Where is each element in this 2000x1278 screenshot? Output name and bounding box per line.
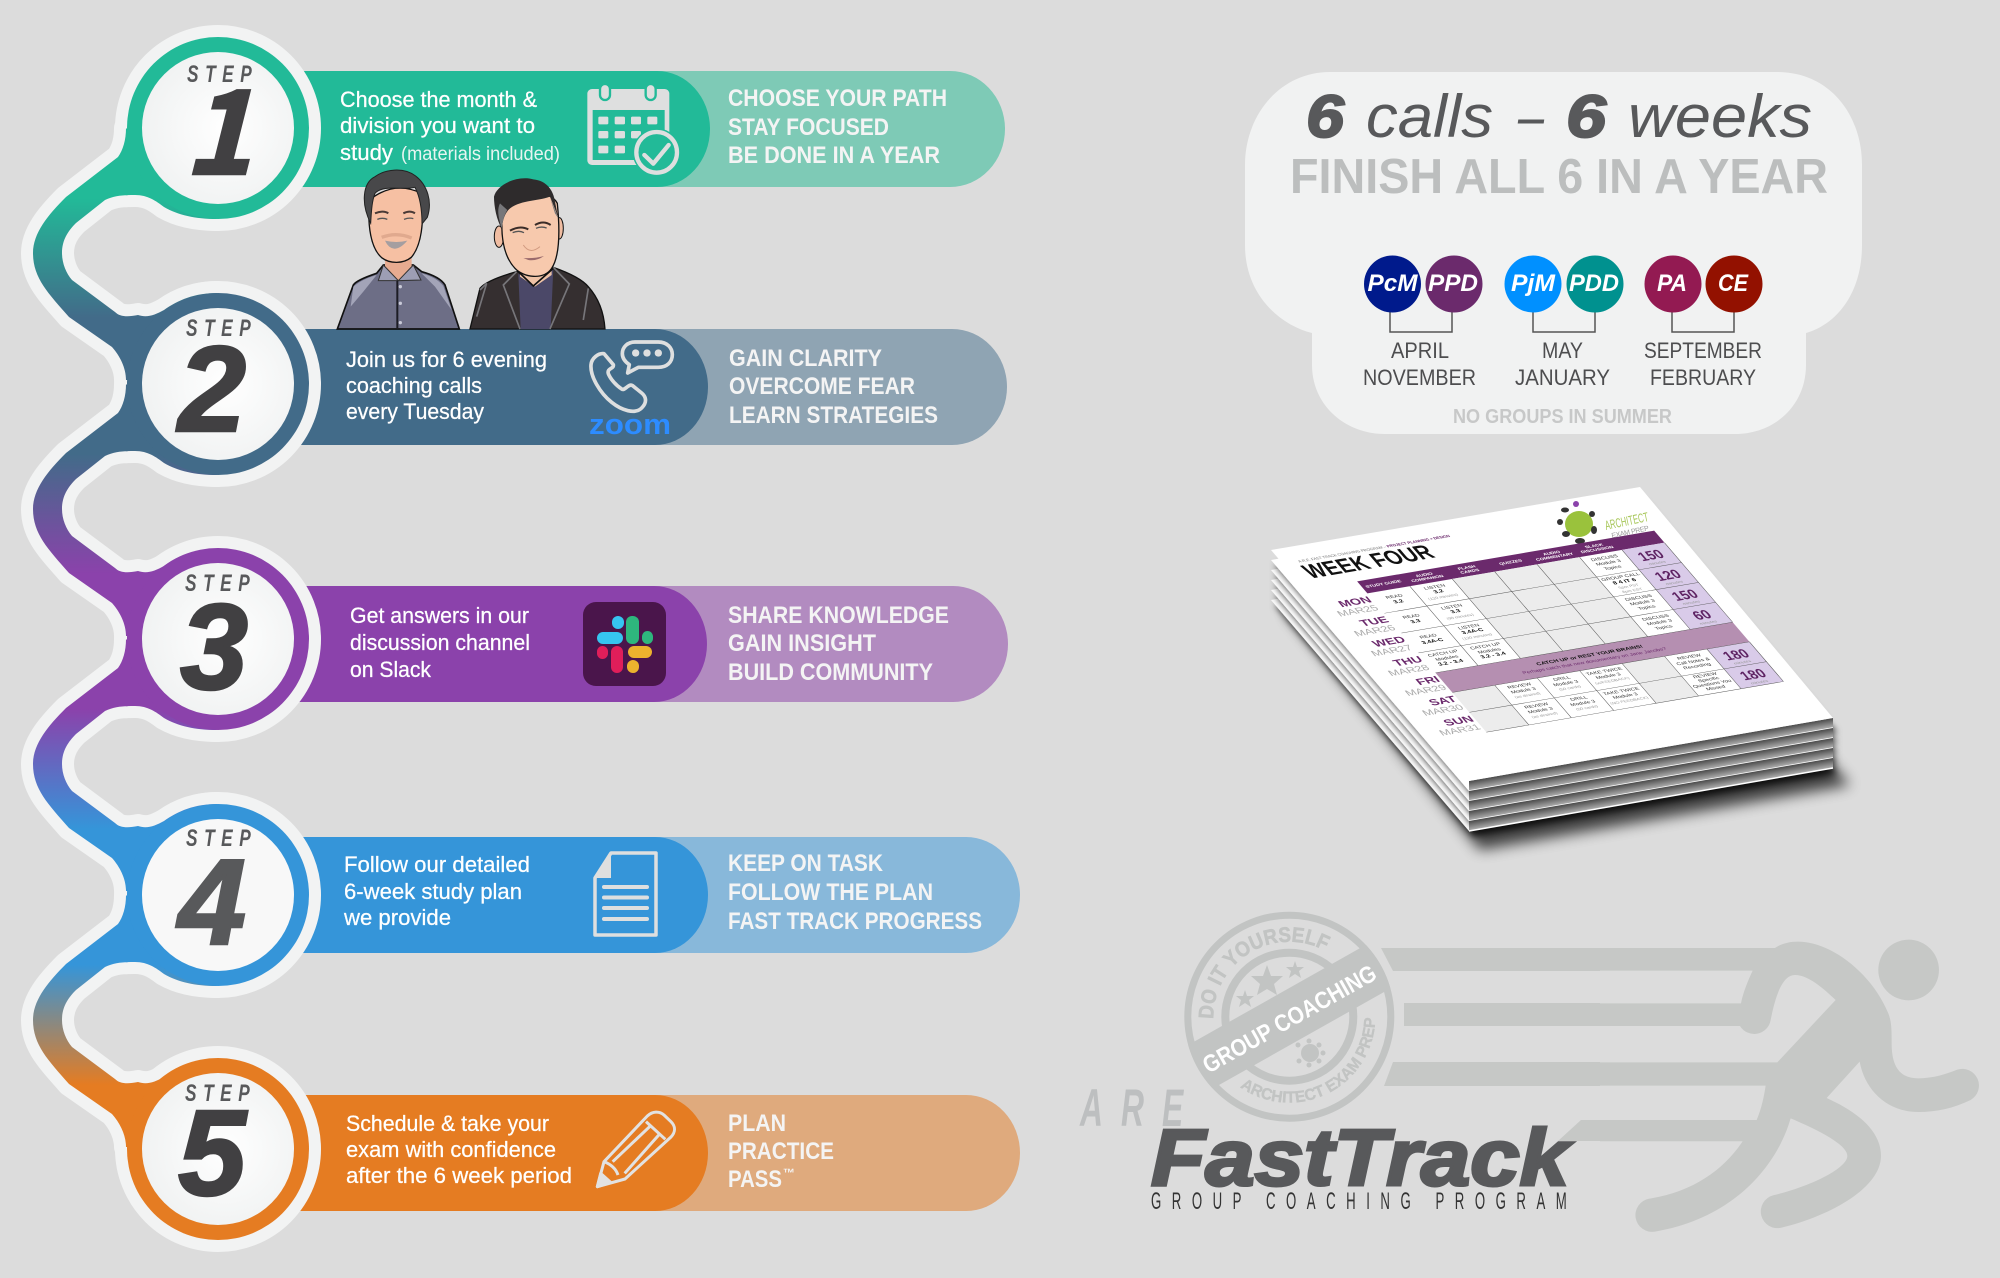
step 4 badge [127, 804, 309, 986]
text: step 1 description [340, 87, 560, 165]
table: minutes [1647, 560, 1668, 566]
text: step 5 benefits: PASS [728, 1166, 782, 1193]
heading: 6 calls 6 weeks: 6 [1566, 83, 1607, 150]
text: step 2 benefits: LEARN STRATEGIES [729, 402, 938, 429]
heading: finish all 6 in a year: FINISH ALL 6 IN A YEAR [1290, 150, 1828, 204]
text: step 4 description: Follow our detailed [344, 852, 530, 877]
table: minutes [1750, 679, 1770, 685]
table: CATCH UP [1427, 649, 1460, 658]
table: minutes [1698, 619, 1719, 626]
table: LISTEN [1423, 584, 1447, 591]
table: 120 [1651, 567, 1685, 584]
table: MAR26 [1352, 624, 1398, 638]
panel: schedule [1245, 72, 1862, 434]
table: Topics [1654, 624, 1675, 631]
heading: 6 calls 6 weeks: 6 [1306, 83, 1345, 150]
exam division circles: PDD [1569, 270, 1619, 297]
table: (50 cards) [1558, 684, 1583, 691]
table: READ [1402, 613, 1422, 620]
table: DRILL [1552, 676, 1572, 682]
icon: slack [583, 602, 666, 686]
step 2 badge [127, 293, 309, 475]
exam division circles: CE [1718, 270, 1749, 297]
icon: pencil [597, 1112, 674, 1187]
month labels [1363, 338, 1762, 390]
table: 3.2 - 3.4 [1479, 651, 1508, 660]
table: (120 minutes) [1427, 592, 1460, 601]
table: LISTEN [1457, 623, 1481, 631]
text: step 5 benefits: PLAN [728, 1110, 786, 1137]
table: minutes [1664, 579, 1685, 586]
heading: 6 calls 6 weeks [1306, 83, 1812, 150]
table: Perhaps catch that new documentary on Jane Jacobs? [1521, 647, 1668, 676]
text: step 4 benefits: FAST TRACK PROGRESS [728, 908, 982, 935]
step 4 badge: STEP [186, 825, 251, 852]
table: AUDIO [1415, 572, 1435, 579]
table: DISCUSS [1624, 594, 1654, 602]
heading: 6 calls 6 weeks: calls [1366, 83, 1493, 150]
panel: step 2 bar [290, 329, 1007, 445]
runner with speed lines [1381, 940, 1979, 1232]
week four schedule sheet: A.R.E. FAST TRACK COACHING PROGRAM – PROJECT PLANNING + DESIGN [1297, 534, 1452, 564]
month labels: JANUARY [1515, 365, 1610, 390]
stamp: do it yourself group coaching: DO IT YOURSELF [1198, 927, 1331, 1018]
text: step 3 benefits: GAIN INSIGHT [728, 630, 876, 657]
table: GROUP CALL [1600, 572, 1642, 583]
table: TAKE TWICE [1602, 687, 1642, 697]
exam division circles: PjM [1511, 270, 1556, 297]
study plan paper stack [1271, 487, 1850, 850]
step 3 badge: 3 [180, 579, 248, 715]
step 4 badge: 4 [175, 834, 246, 970]
table: FRI [1413, 674, 1443, 687]
panel: step 5 bar [290, 1095, 1020, 1211]
table: FLASH [1457, 564, 1478, 571]
table: MON [1335, 595, 1375, 609]
table: REVIEW [1523, 702, 1551, 710]
table: Missed [1705, 685, 1727, 692]
table: READ [1385, 594, 1405, 600]
logo: ARE FastTrack group coaching program [1079, 1079, 1573, 1215]
text: step 1 benefits [728, 85, 947, 169]
flowing path: gradient connectors [33, 128, 217, 1147]
table: MAR27 [1369, 644, 1415, 658]
text: step 5 description [346, 1111, 572, 1188]
exam division circles [1364, 256, 1762, 332]
table: minutes [1681, 599, 1702, 606]
text: step 5 description: after the 6 week period [346, 1163, 572, 1188]
icon: phone with speech bubble and zoom [589, 342, 672, 441]
table: Module 3 [1527, 707, 1555, 715]
text: step 3 description: Get answers in our [350, 603, 529, 628]
text: step 3 description [350, 603, 530, 682]
table: 60 [1689, 607, 1715, 623]
table: Module 3 [1646, 619, 1674, 627]
table: SLACK [1584, 543, 1606, 550]
text: step 2 benefits [729, 345, 938, 429]
table: REVIEW [1506, 682, 1534, 690]
text: step 5 benefits: ™ [783, 1166, 795, 1180]
table: DISCUSSION [1580, 545, 1616, 555]
month labels: MAY [1542, 338, 1583, 363]
illustration: two coaches caricature [337, 170, 605, 329]
text: step 4 benefits: KEEP ON TASK [728, 850, 884, 877]
exam division circles: PPD [1428, 270, 1478, 297]
month labels: FEBRUARY [1650, 365, 1756, 390]
table: MAR25 [1335, 604, 1381, 619]
table: WED [1369, 634, 1409, 649]
text: step 2 description: every Tuesday [346, 399, 484, 424]
text: step 2 benefits: OVERCOME FEAR [729, 373, 915, 400]
table: (as desired) [1513, 691, 1542, 699]
table: TAKE TWICE [1585, 667, 1625, 677]
table: 5pm PST [1617, 583, 1640, 590]
week four schedule sheet [1292, 503, 1783, 739]
week four schedule sheet: WEEK FOUR [1296, 540, 1440, 583]
table: (w/FEEDBACK) [1594, 676, 1631, 685]
table: READ [1419, 633, 1439, 640]
table: Module 3 [1612, 692, 1639, 700]
text: step 5 description: Schedule & take your [346, 1111, 549, 1136]
table: COMPANION [1410, 574, 1446, 584]
panel: step 3 bar [290, 586, 1008, 702]
text: step 1 benefits: BE DONE IN A YEAR [728, 142, 940, 169]
table: QUIZZES [1498, 559, 1524, 566]
text: step 3 benefits: BUILD COMMUNITY [728, 659, 933, 686]
table: Module 3 [1595, 559, 1623, 567]
text: step 4 description [343, 852, 530, 930]
table: 150 [1668, 587, 1702, 604]
step 5 badge: 5 [178, 1085, 248, 1221]
table: REVIEW [1676, 653, 1704, 661]
panel: step 4 bar [290, 837, 1020, 953]
table: AUDIO [1542, 550, 1562, 557]
stamp: do it yourself group coaching: ARCHITECT EXAM PREP [1240, 1018, 1375, 1103]
table: 3.4A-C [1420, 637, 1446, 646]
text: step 5 benefits: PRACTICE [728, 1138, 834, 1165]
table: 180 [1736, 666, 1770, 683]
exam division circles: PcM [1368, 270, 1419, 297]
exam division circles: PA [1657, 270, 1687, 297]
table: MAR29 [1403, 683, 1449, 698]
logo: ARE FastTrack group coaching program: FastTrack [1151, 1113, 1573, 1202]
text: step 4 description: 6-week study plan [344, 879, 522, 904]
table: 3.2 - 3.4 [1437, 658, 1466, 667]
heading: 6 calls 6 weeks: weeks [1628, 83, 1812, 150]
step 3 badge: STEP [185, 570, 250, 597]
table: Module 3 [1510, 687, 1538, 695]
table: Call Notes & [1675, 657, 1712, 667]
text: step 1 benefits: STAY FOCUSED [728, 114, 889, 141]
text: step 2 description: Join us for 6 evening [346, 347, 547, 372]
logo on sheet: EXAM PREP [1611, 525, 1650, 540]
table: CARDS [1459, 568, 1481, 575]
text: step 1 description: study [340, 140, 393, 165]
icon: phone with speech bubble and zoom: zoom [589, 409, 671, 441]
step 2 badge: STEP [186, 315, 251, 342]
month labels: APRIL [1391, 338, 1449, 363]
table: Topics [1637, 604, 1658, 611]
text: step 5 benefits [728, 1110, 834, 1193]
table: (50 cards) [1575, 704, 1600, 711]
left coach [337, 170, 459, 329]
table: SUN [1440, 714, 1477, 728]
table: Module 3 [1595, 672, 1622, 681]
stamp: do it yourself group coaching [1184, 912, 1394, 1122]
heading: 6 calls 6 weeks: – [1517, 83, 1544, 150]
table: SAT [1426, 694, 1460, 708]
table: DISCUSS [1641, 614, 1671, 622]
text: step 3 description: discussion channel [350, 630, 530, 655]
table: Specific [1697, 676, 1721, 684]
table: 3.2 [1392, 598, 1406, 605]
table: 3.4A-C [1460, 627, 1486, 636]
icon: calendar with check [587, 84, 681, 176]
step 2 badge: 2 [176, 321, 246, 457]
right coach [470, 178, 605, 329]
text: step 1 description: (materials included) [401, 144, 560, 165]
logo: ARE FastTrack group coaching program: GROUP COACHING PROGRAM [1151, 1188, 1567, 1215]
table [1316, 531, 1783, 739]
logo on sheet: ARCHITECT [1604, 509, 1650, 533]
table: 180 [1719, 646, 1753, 663]
text: step 5 description: exam with confidence [346, 1137, 556, 1162]
table: CATCH UP [1469, 642, 1503, 651]
table: 150 [1634, 547, 1668, 564]
table: Module 3 [1569, 699, 1597, 708]
table: 8 4 IT 6 [1611, 577, 1639, 586]
table: Module 3 [1629, 599, 1657, 607]
table: Modules [1434, 654, 1460, 662]
stacked paper edges [1469, 718, 1833, 831]
text: step 3 description: on Slack [350, 657, 432, 682]
table: 8pm EST [1621, 587, 1644, 594]
text: step 3 benefits: SHARE KNOWLEDGE [728, 602, 949, 629]
text: step 4 description: we provide [343, 905, 451, 930]
text: step 4 benefits: FOLLOW THE PLAN [728, 879, 933, 906]
stamp: do it yourself group coaching: GROUP COACHING [1198, 960, 1381, 1079]
table: CATCH UP or REST YOUR BRAINS! [1535, 645, 1645, 667]
table: MAR28 [1386, 663, 1432, 678]
table: DRILL [1569, 695, 1589, 702]
text: step 3 benefits [728, 602, 949, 686]
table: 3.2 [1432, 588, 1446, 595]
table: TUE [1357, 614, 1391, 628]
text: step 1 description: division you want to [340, 113, 535, 138]
step 5 badge: STEP [185, 1080, 250, 1107]
step 1 badge [127, 37, 309, 219]
table: 3.3 [1449, 608, 1463, 615]
step 1 badge: STEP [187, 61, 252, 88]
text: step 1 benefits: CHOOSE YOUR PATH [728, 85, 947, 112]
table: STUDY GUIDE [1364, 579, 1403, 589]
table: Recording [1682, 662, 1713, 671]
text: step 2 benefits: GAIN CLARITY [729, 345, 882, 372]
table: (NO FEEDBACK) [1609, 696, 1650, 705]
table: Topics [1603, 565, 1623, 572]
month labels: SEPTEMBER [1644, 338, 1762, 363]
flowing path: connector outlines [33, 37, 309, 1240]
text: step 1 description: Choose the month & [340, 87, 537, 112]
table: REVIEW [1692, 672, 1720, 680]
table: Module 3 [1552, 680, 1580, 688]
table: (120 minutes) [1461, 632, 1494, 641]
note: no groups in summer: NO GROUPS IN SUMMER [1453, 406, 1672, 428]
table: DISCUSS [1590, 554, 1620, 563]
table: (as desired) [1530, 711, 1559, 719]
text: step 2 description: coaching calls [346, 373, 482, 398]
table: LISTEN [1440, 603, 1464, 611]
month labels: NOVEMBER [1363, 365, 1476, 390]
text: step 4 benefits [728, 850, 982, 935]
step 1 badge: 1 [184, 40, 252, 208]
icon: document [595, 853, 656, 935]
text: step 2 description [346, 347, 547, 424]
table: Questions You [1692, 679, 1733, 689]
table: MAR30 [1420, 703, 1466, 718]
table: (90 minutes) [1445, 613, 1475, 621]
table: Modules [1477, 647, 1503, 655]
logo on sheet [1557, 501, 1650, 544]
table: MAR31 [1437, 723, 1483, 738]
panel: step 1 bar [290, 71, 1005, 187]
step 5 badge [127, 1058, 309, 1240]
logo: ARE FastTrack group coaching program: ARE [1079, 1079, 1185, 1138]
table: 3.3 [1409, 618, 1423, 625]
table: minutes [1733, 659, 1753, 665]
table: COMMENTARY [1535, 552, 1576, 562]
step 3 badge [127, 548, 309, 730]
table: THU [1390, 654, 1426, 668]
